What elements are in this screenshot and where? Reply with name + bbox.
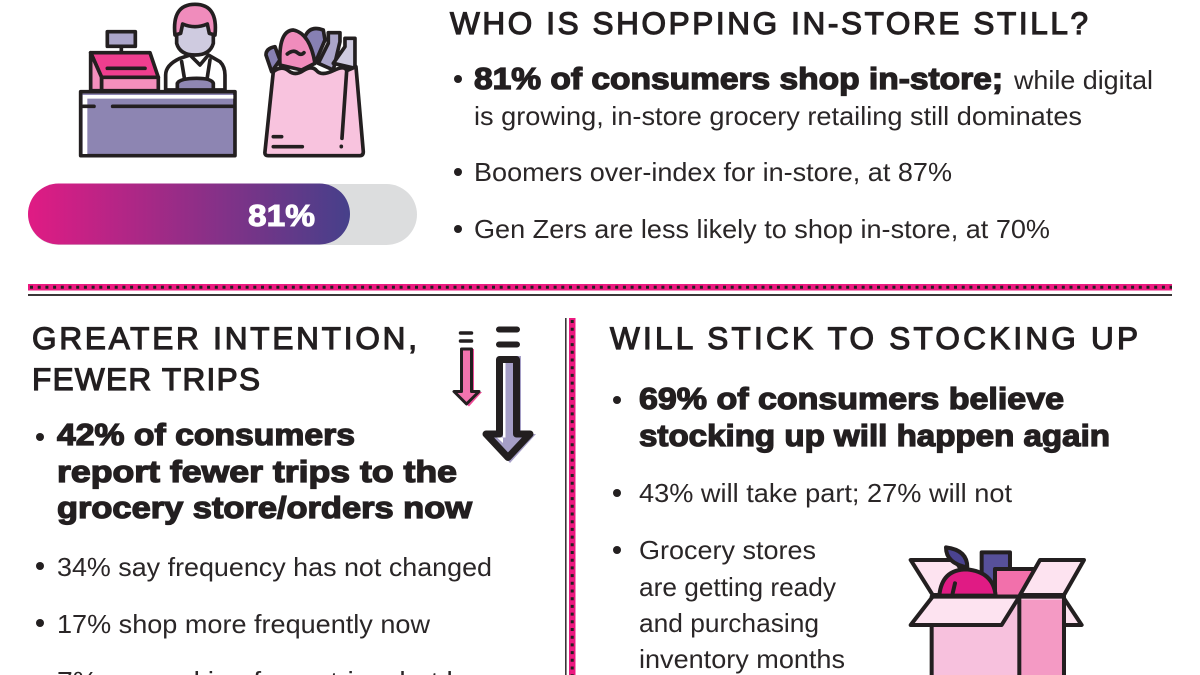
icon: grocery bag <box>265 28 363 156</box>
text block: stocking up facts <box>613 382 1110 674</box>
text block: stocking up facts: Grocery stores <box>639 535 816 565</box>
heading: greater intention, fewer trips: GREATER INTENTION, <box>32 320 417 356</box>
heading: will stick to stocking up: WILL STICK TO STOCKING UP <box>610 320 1138 356</box>
text block: stocking up facts: inventory months <box>639 644 845 674</box>
progress value: 81% <box>248 198 315 233</box>
text block: in-store shopping facts: Boomers over-index for in-store, at 87% <box>474 157 952 187</box>
text block: fewer trips facts <box>36 418 492 675</box>
text block: in-store shopping facts: 81% of consumers shop in-store; <box>474 62 1003 96</box>
heading: greater intention, fewer trips: FEWER TRIPS <box>32 361 260 397</box>
progress bar: 81% <box>28 184 417 245</box>
text block: fewer trips facts: 17% shop more frequently now <box>57 609 430 639</box>
icon: cashier at register <box>81 4 235 156</box>
text block: stocking up facts: and purchasing <box>639 608 819 638</box>
text block: fewer trips facts: 34% say frequency has not changed <box>57 552 492 582</box>
text block: fewer trips facts: 42% of consumers <box>57 418 355 452</box>
text block: stocking up facts: stocking up will happen again <box>639 419 1110 453</box>
icon: stocked box <box>911 547 1084 675</box>
text block: fewer trips facts: report fewer trips to the <box>57 455 457 489</box>
heading: who is shopping in-store still: WHO IS SHOPPING IN-STORE STILL? <box>450 5 1088 41</box>
icon: small pink down arrow <box>454 333 482 406</box>
text block: fewer trips facts: grocery store/orders now <box>57 491 472 525</box>
text block: in-store shopping facts: is growing, in-store grocery retailing still dominates <box>474 101 1082 131</box>
heading: greater intention, fewer trips <box>32 320 417 397</box>
text block: in-store shopping facts: while digital <box>1013 65 1153 95</box>
icon: large purple down arrow <box>486 330 536 463</box>
text block: in-store shopping facts <box>454 62 1153 244</box>
text block: in-store shopping facts: Gen Zers are less likely to shop in-store, at 70% <box>474 214 1050 244</box>
text block: stocking up facts: 43% will take part; 27% will not <box>639 478 1013 508</box>
text block: stocking up facts: are getting ready <box>639 572 836 602</box>
text block: stocking up facts: 69% of consumers believe <box>639 382 1064 416</box>
